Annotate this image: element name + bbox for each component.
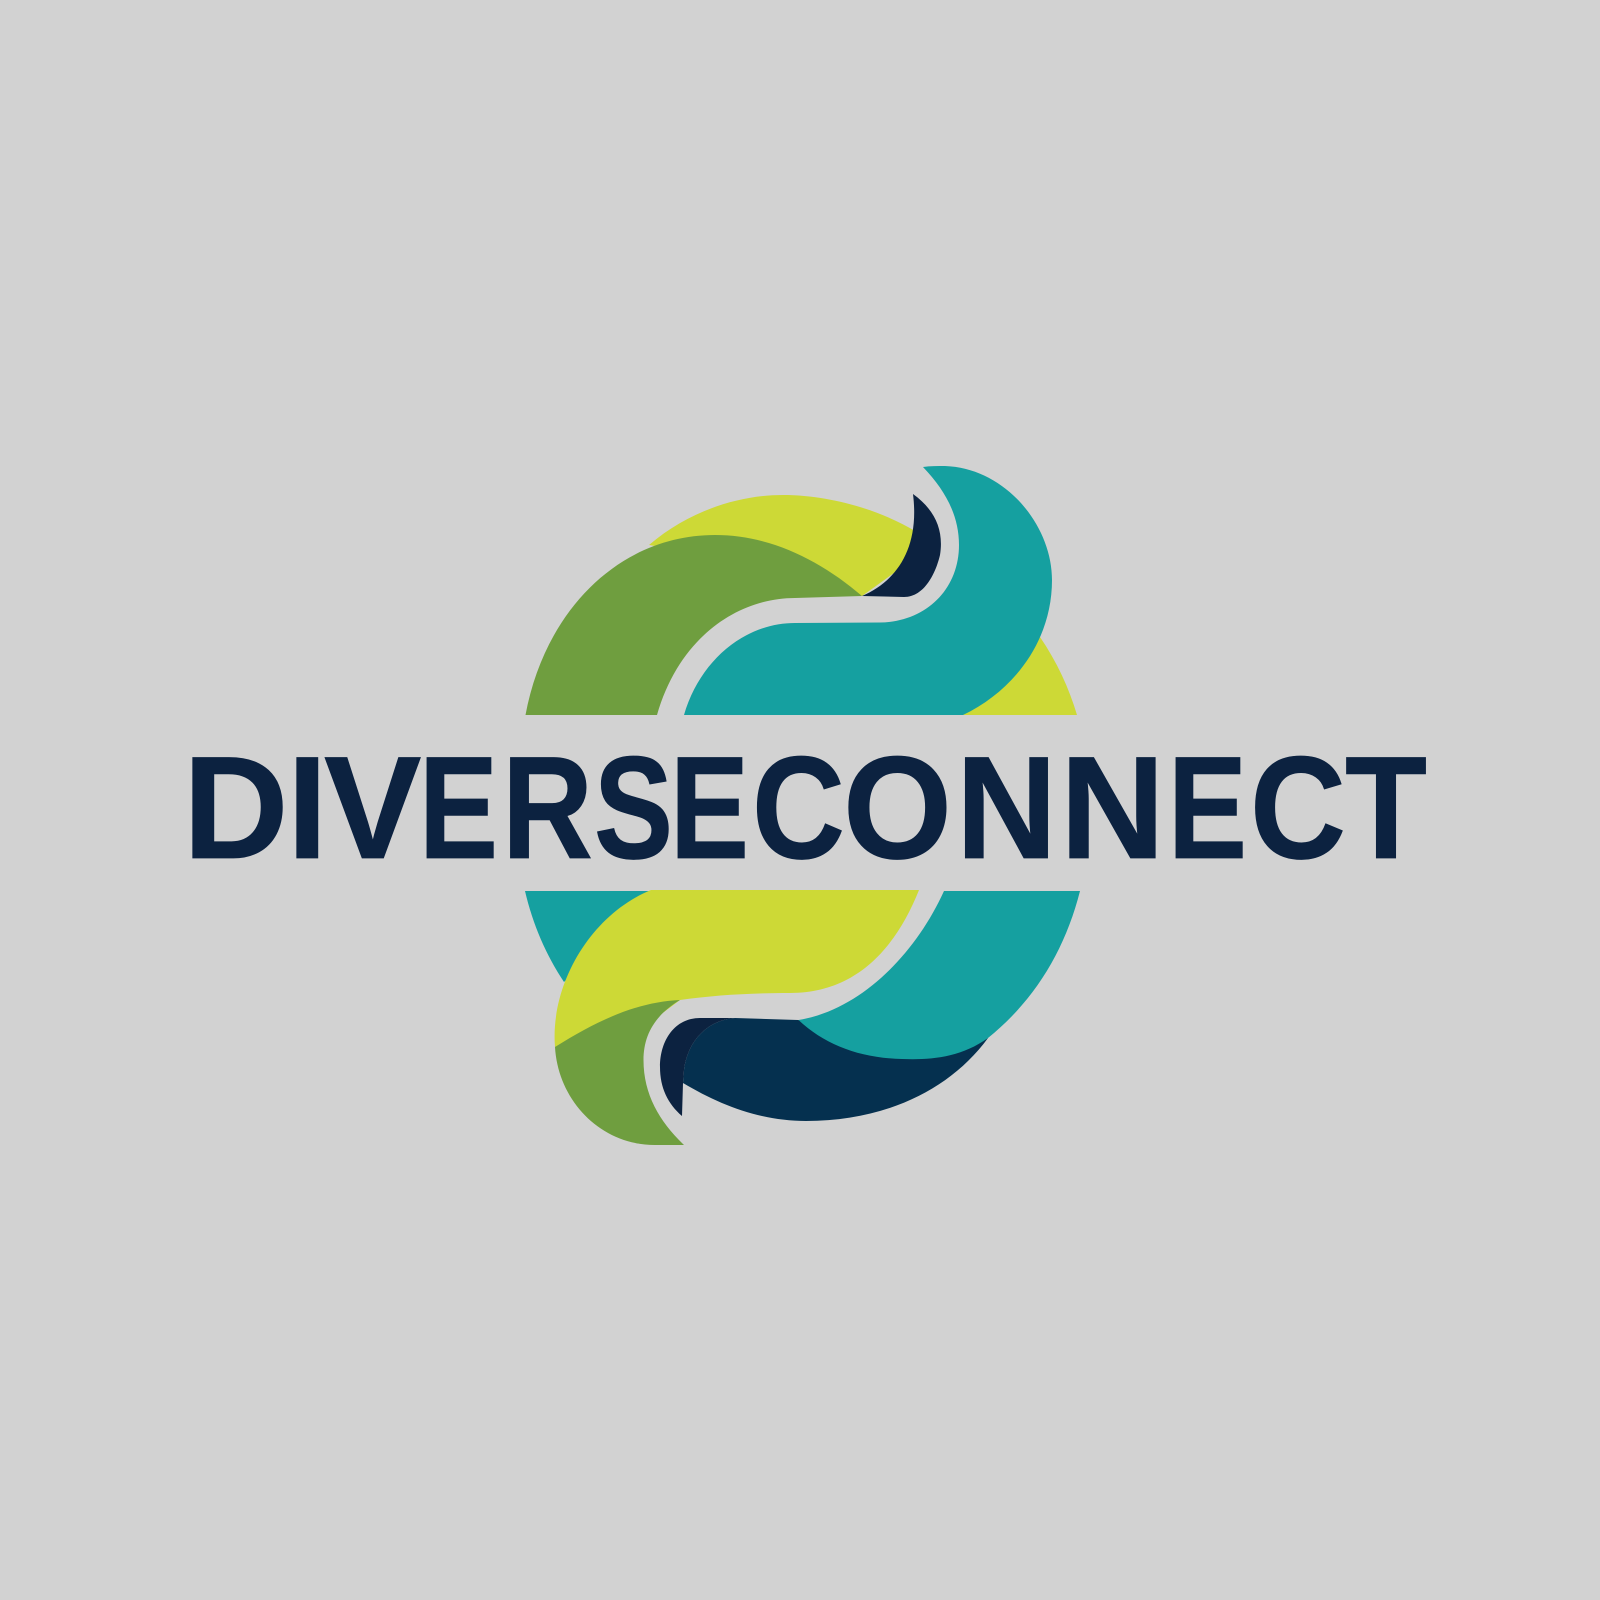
lime arc: right [963,637,1077,715]
wordmark: E [419,726,498,889]
wordmark: C [752,726,845,889]
wordmark: D [183,726,288,889]
green swoosh [526,535,862,715]
teal swoosh: right [798,891,1080,1059]
wordmark: R [502,726,593,889]
navy horn [862,494,941,597]
wordmark: V [324,726,421,889]
wordmark: T [1345,726,1427,889]
dark navy inner tip [660,1018,735,1116]
wordmark: C [1250,726,1346,889]
wordmark: N [1060,726,1165,889]
wordmark: E [670,726,749,889]
wordmark: O [843,726,952,889]
logo mark: upper half [526,466,1077,715]
logo mark: lower half [525,890,1080,1145]
navy band [683,1018,988,1121]
teal wedge: left [525,891,660,982]
wordmark: N [956,726,1057,889]
green tail [555,1000,684,1145]
wordmark: I [287,726,328,889]
wordmark: S [594,726,673,889]
lime arc: top [649,495,915,596]
teal swoosh [684,466,1052,715]
lime swoosh [555,890,919,1047]
wordmark: E [1168,726,1247,889]
